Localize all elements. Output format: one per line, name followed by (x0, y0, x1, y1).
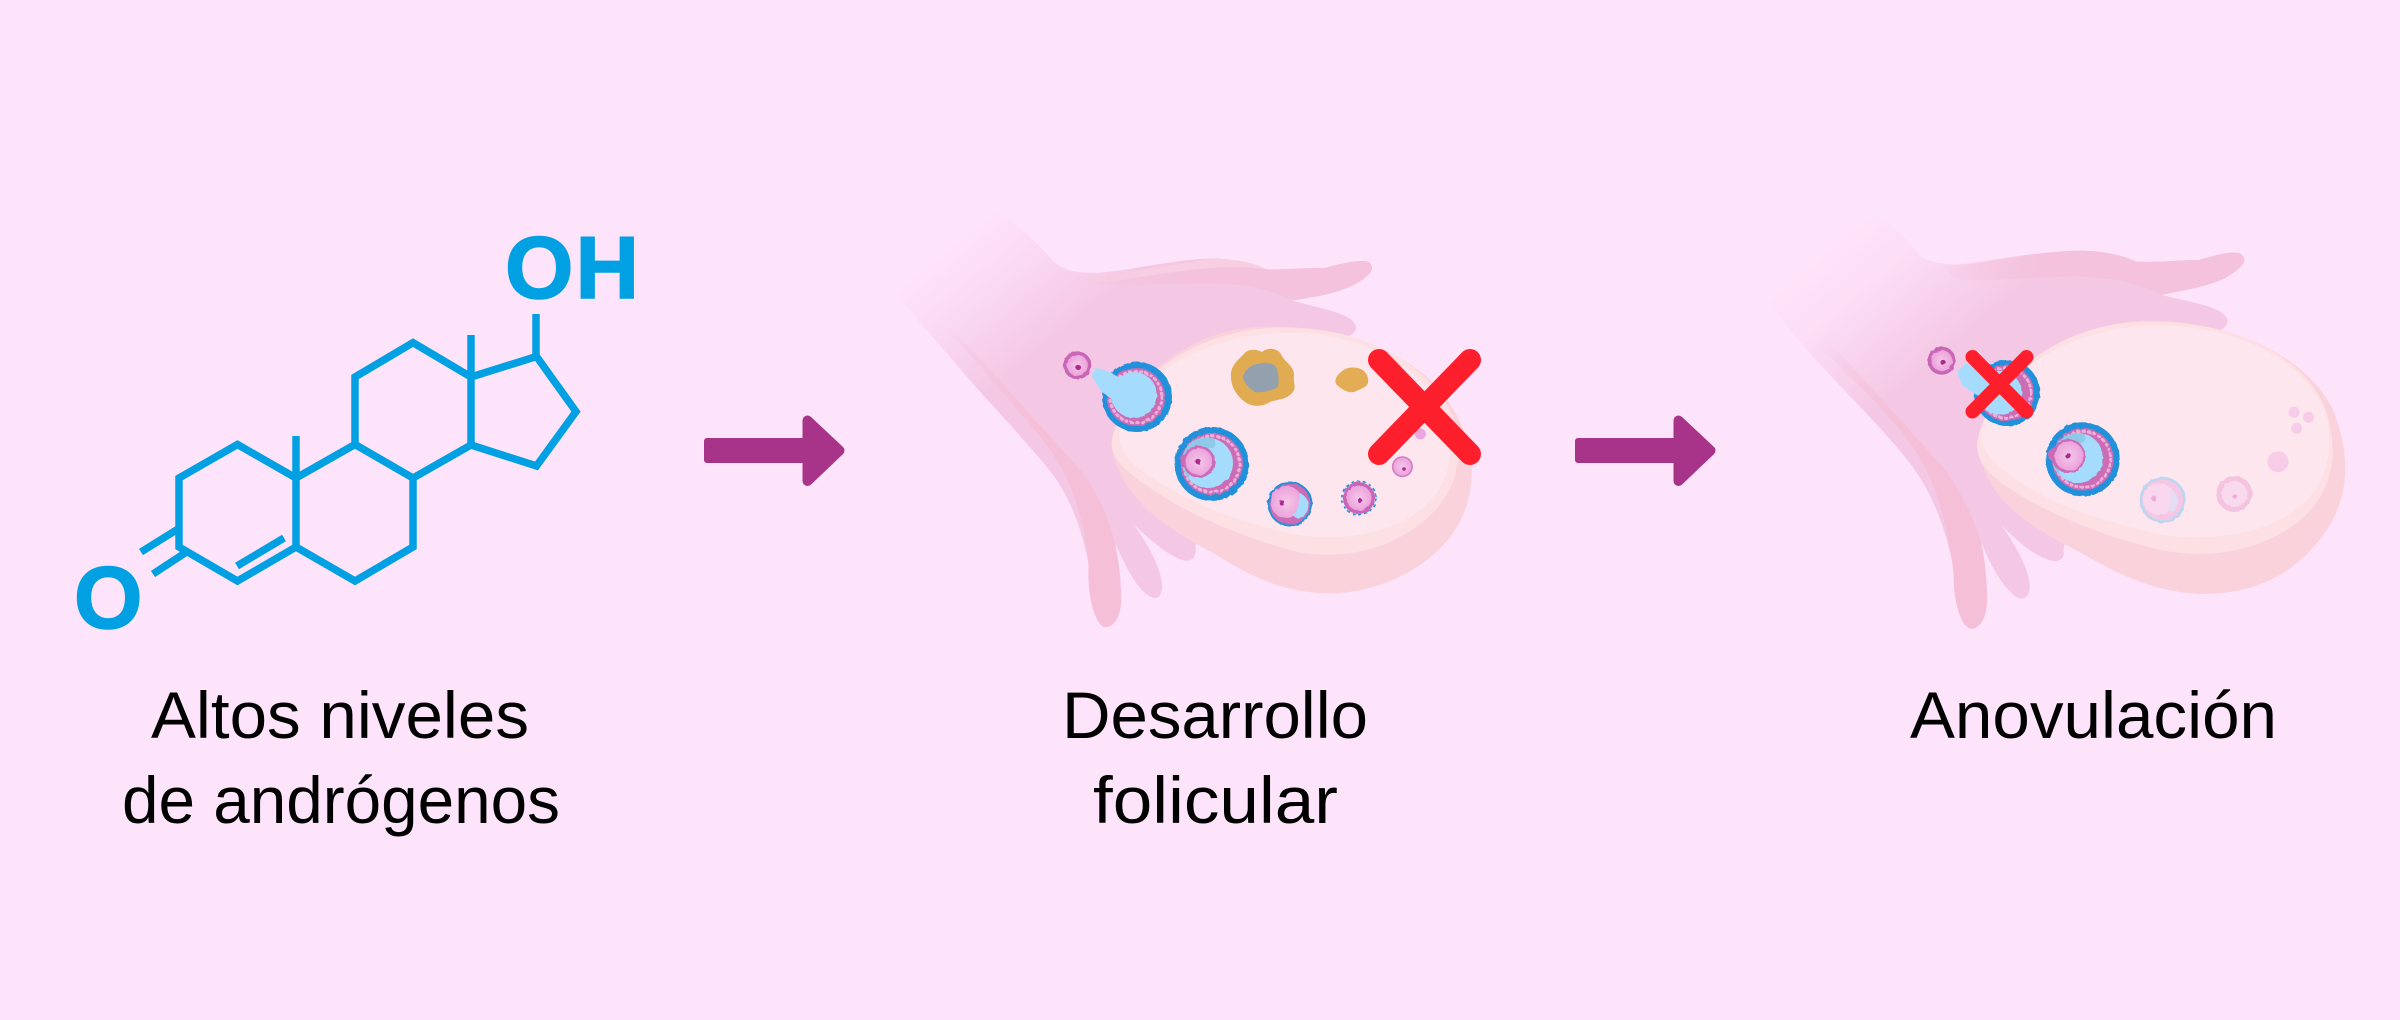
ovum released (1063, 351, 1091, 379)
corpus albicans (1335, 367, 1368, 392)
caption: anovulation: Anovulación (1910, 678, 2277, 752)
molecule: testosterone structure (74, 218, 641, 647)
primary follicle (1342, 481, 1376, 515)
red cross (1379, 360, 1470, 454)
caption: follicular development: folicular (1093, 763, 1338, 837)
arrow 1 (705, 420, 840, 481)
label: O: O (74, 548, 144, 647)
steroid ring skeleton (141, 314, 576, 581)
antral follicle (2046, 422, 2120, 496)
caption: high androgen levels (122, 678, 560, 837)
illustration: ovary with follicular development (893, 207, 1472, 627)
red cross (1972, 357, 2026, 412)
caption: high androgen levels: Altos niveles (151, 678, 529, 752)
faded primordial follicles (2268, 407, 2314, 472)
primordial follicles (1392, 428, 1426, 477)
caption: high androgen levels: de andrógenos (122, 763, 560, 837)
blocked ruptured follicle (1957, 360, 2040, 426)
secondary follicle (1268, 482, 1312, 526)
ruptured follicle (1092, 362, 1172, 432)
fallopian tube and ovary shapes (1756, 208, 2345, 629)
label: OH: OH (505, 218, 641, 317)
arrow 2 (1576, 420, 1710, 481)
faded secondary follicle (2140, 477, 2186, 523)
faded primary follicle (2216, 476, 2252, 512)
antral follicle (1175, 427, 1249, 501)
caption: follicular development: Desarrollo (1062, 678, 1368, 752)
fallopian tube and ovary shapes (893, 207, 1472, 627)
illustration: anovulation ovary (1756, 208, 2345, 629)
ovum (1928, 347, 1956, 375)
caption: follicular development (1062, 678, 1368, 837)
corpus luteum (1231, 349, 1295, 406)
